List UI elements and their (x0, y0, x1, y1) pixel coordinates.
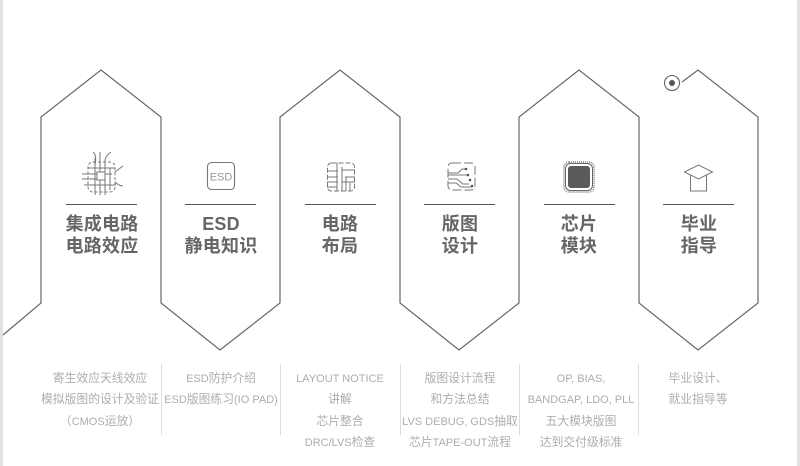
text block: ESD (164, 371, 278, 406)
text block: layout (296, 373, 384, 449)
title: 版图设计: 设计 (442, 236, 478, 256)
text block: layout: LAYOUT NOTICE (296, 373, 384, 385)
title: 毕业指导: 毕业 (681, 214, 717, 234)
title: ESD 静电知识: ESD (202, 214, 240, 234)
column separator (161, 364, 162, 435)
right edge strip (797, 0, 800, 466)
text block: chip modules: OP, BIAS, (557, 373, 605, 385)
text block: graduation: 毕业设计、 (668, 371, 728, 385)
title: 电路布局: 布局 (322, 236, 358, 256)
text block: layout: 讲解 (328, 392, 352, 406)
text block: chip modules: BANDGAP, LDO, PLL (528, 394, 634, 406)
text block: circuit effects: （CMOS运放） (60, 414, 140, 428)
title: ESD 静电知识 (185, 214, 257, 256)
text block: circuit effects: 寄生效应天线效应 (53, 371, 147, 385)
title: 版图设计: 版图 (442, 214, 478, 234)
text block: layout: 芯片整合 (316, 414, 364, 428)
text block: layout: DRC/LVS检查 (305, 435, 375, 449)
title: 电路布局: 电路 (322, 214, 358, 234)
title: 芯片模块 (561, 214, 597, 256)
left edge strip (0, 0, 3, 466)
title: 电路布局 (322, 214, 358, 256)
title: 毕业指导: 指导 (681, 236, 717, 256)
column separator (280, 364, 281, 435)
column separator (400, 364, 401, 435)
column separator (638, 364, 639, 435)
text block: circuit effects: 模拟版图的设计及验证 (41, 392, 159, 406)
title: 集成电路 电路效应: 电路效应 (66, 236, 138, 256)
title: 毕业指导 (681, 214, 717, 256)
icon: ESD badge: ESD (210, 172, 232, 184)
text block: circuit effects (41, 371, 159, 428)
text block: layout design: 和方法总结 (430, 392, 490, 406)
text block: chip modules (528, 373, 634, 449)
title: ESD 静电知识: 静电知识 (185, 236, 257, 256)
text block: chip modules: 达到交付级标准 (540, 435, 622, 449)
text block: layout design: 芯片TAPE-OUT流程 (409, 435, 511, 449)
text block: layout design: LVS DEBUG, GDS抽取 (402, 414, 518, 428)
title: 集成电路 电路效应 (66, 214, 138, 256)
title: 集成电路 电路效应: 集成电路 (66, 214, 138, 234)
title: 芯片模块: 芯片 (561, 214, 597, 234)
title: 版图设计 (442, 214, 478, 256)
text block: layout design (402, 371, 518, 449)
text block: layout design: 版图设计流程 (425, 371, 495, 385)
text block: ESD: ESD版图练习(IO PAD) (164, 392, 278, 406)
text block: graduation (668, 371, 728, 406)
text block: ESD: ESD防护介绍 (186, 371, 256, 385)
title: 芯片模块: 模块 (561, 236, 597, 256)
column separator (519, 364, 520, 435)
text block: graduation: 就业指导等 (668, 392, 728, 406)
text block: chip modules: 五大模块版图 (546, 414, 616, 428)
